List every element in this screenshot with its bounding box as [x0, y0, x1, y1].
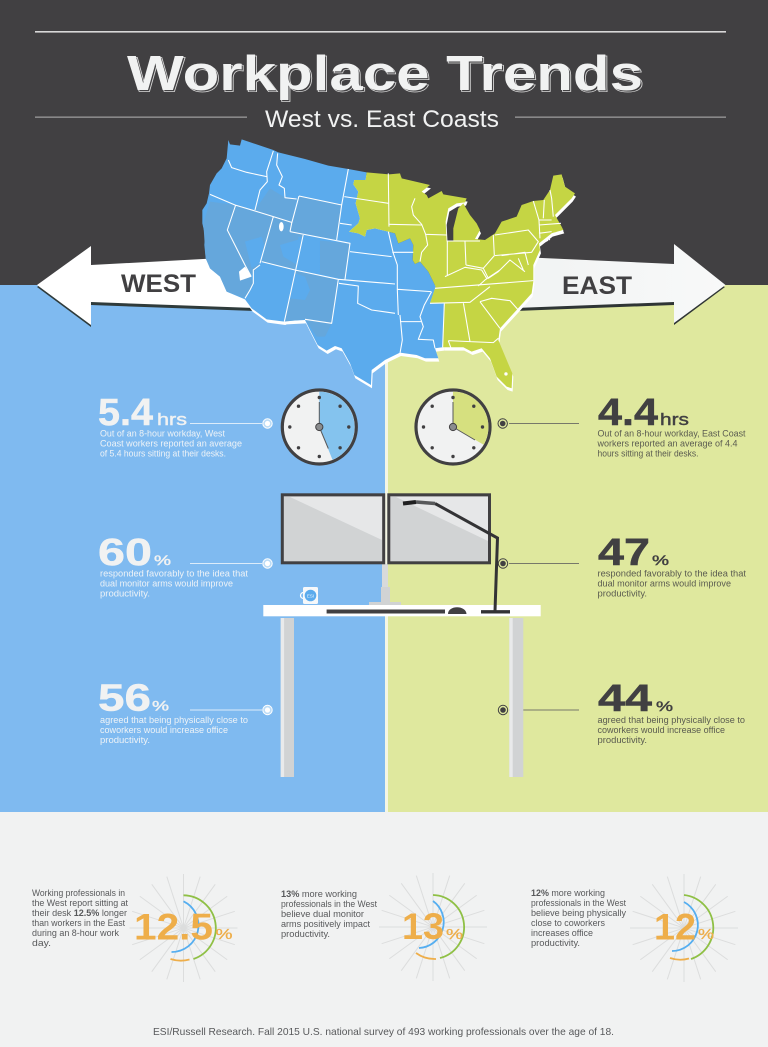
stat: 44 percent east: 44 — [598, 678, 652, 720]
stat: 4.4 hrs east: workers reported an average of 4.4 — [597, 438, 738, 450]
map white offset edge — [203, 143, 576, 392]
label: west: WEST — [121, 270, 196, 298]
stat: 47 percent east: 47 — [598, 532, 650, 574]
figure: 12 — [654, 906, 696, 948]
subtitle: West vs. East Coasts — [265, 106, 499, 133]
text: their desk 12.5% longer — [32, 907, 127, 918]
text: 13% more working — [281, 888, 357, 899]
coffee mug: ESI — [307, 593, 314, 598]
chart: radial burst — [379, 873, 487, 981]
stat: 56 percent west: 56 — [98, 678, 151, 720]
text: professionals in the West — [281, 898, 377, 909]
text: professionals in the West — [531, 897, 626, 908]
right desk leg — [509, 618, 523, 777]
stat: 56 percent west: coworkers would increase office — [100, 725, 228, 736]
text — [32, 887, 128, 948]
stat: 44 percent east — [498, 678, 745, 746]
chart: radial burst — [630, 874, 738, 982]
text: the West report sitting at — [32, 897, 128, 908]
arrow: west — [37, 246, 255, 327]
stat: 60 percent west: 60 — [98, 532, 152, 574]
left monitor — [282, 495, 384, 563]
label: east: EAST — [562, 272, 632, 300]
stat: 4.4 hrs east: hrs — [660, 410, 689, 429]
panel: summary stat 13 — [281, 873, 487, 981]
icon: west clock — [282, 390, 356, 464]
figure — [654, 906, 714, 948]
stat: 4.4 hrs east: 4.4 — [598, 392, 658, 434]
figure: 13 — [402, 906, 444, 947]
stat: 44 percent east: % — [656, 698, 673, 714]
panel: east stats — [498, 392, 746, 746]
figure: % — [446, 926, 463, 943]
text: day. — [32, 937, 51, 948]
source footnote: ESI/Russell Research. Fall 2015 U.S. national survey of 493 working professionals over the age of 18. — [153, 1026, 614, 1038]
text: arms positively impact — [281, 918, 370, 929]
region: west states — [202, 139, 444, 385]
text — [531, 887, 626, 948]
panel: summary background — [0, 812, 768, 1047]
stat: 5.4 hrs west: of 5.4 hours sitting at their desks. — [100, 448, 226, 459]
text: 12% more working — [531, 887, 605, 898]
stat: 47 percent east: responded favorably to the idea that — [598, 568, 746, 580]
mouse — [448, 607, 466, 614]
stat: 60 percent west: dual monitor arms would improve — [100, 578, 233, 590]
stat: 56 percent west: % — [152, 698, 169, 714]
map: United States — [202, 139, 576, 392]
stat: 60 percent west: productivity. — [100, 588, 150, 599]
stat: 5.4 hrs west — [98, 392, 272, 459]
stat: 56 percent west: productivity. — [100, 735, 150, 746]
title: Workplace Trends — [128, 48, 644, 102]
stat: 4.4 hrs east — [498, 392, 746, 459]
text: Working professionals in — [32, 887, 125, 898]
salt lake and coastal details — [209, 222, 508, 376]
stat: 44 percent east: agreed that being physically close to — [598, 715, 745, 726]
panel: west stats — [98, 392, 272, 746]
stat: 47 percent east: % — [652, 552, 669, 568]
panel: east background — [388, 285, 768, 812]
panel: west background — [0, 285, 385, 812]
text: during an 8-hour work — [32, 927, 119, 938]
text — [281, 888, 377, 939]
text: than workers in the East — [32, 917, 125, 928]
stat: 5.4 hrs west: 5.4 — [98, 392, 153, 434]
figure: % — [698, 926, 714, 943]
text: increases office — [531, 927, 593, 938]
desk lamp — [403, 502, 510, 612]
stat: 4.4 hrs east: hours sitting at their desks. — [598, 448, 698, 459]
stat: 5.4 hrs west: hrs — [157, 410, 187, 429]
stat: 47 percent east — [498, 532, 746, 599]
stat: 60 percent west: % — [154, 552, 171, 568]
stat: 47 percent east: dual monitor arms would improve — [598, 578, 731, 590]
text: believe being physically — [531, 907, 626, 918]
stat: 5.4 hrs west: Out of an 8-hour workday, West — [100, 428, 225, 440]
text: close to coworkers — [531, 917, 605, 928]
stat: 44 percent east: productivity. — [598, 735, 647, 746]
text: productivity. — [531, 937, 580, 948]
stat: 47 percent east: productivity. — [598, 588, 647, 599]
stat: 4.4 hrs east: Out of an 8-hour workday, East Coast — [598, 428, 746, 440]
title: Workplace Trends — [127, 47, 643, 101]
text: believe dual monitor — [281, 908, 364, 919]
stat: 60 percent west — [98, 532, 272, 599]
illustration: desk with dual monitors — [263, 495, 541, 777]
desk top — [263, 605, 541, 616]
stat: 56 percent west — [98, 678, 272, 746]
stat: 60 percent west: responded favorably to the idea that — [100, 568, 248, 580]
text: productivity. — [281, 928, 330, 939]
figure: % — [216, 926, 232, 943]
state borders — [210, 151, 563, 353]
icon: east clock — [416, 390, 490, 464]
right monitor — [389, 495, 490, 563]
left desk leg — [281, 618, 294, 777]
region: east states — [349, 172, 575, 388]
arrow: east — [515, 244, 726, 325]
monitor stand — [369, 564, 401, 606]
stat: 5.4 hrs west: Coast workers reported an average — [100, 438, 242, 450]
stat: 44 percent east: coworkers would increase office — [598, 725, 725, 736]
figure: 12.5 — [134, 906, 213, 948]
darker state shading — [203, 188, 350, 337]
coffee mug — [300, 587, 318, 604]
keyboard — [327, 610, 445, 614]
figure — [402, 906, 463, 947]
panel: summary stat 12 — [531, 874, 738, 982]
panel: summary stat 12.5 — [32, 874, 238, 982]
stat: 56 percent west: agreed that being physically close to — [100, 715, 248, 726]
panel: header background — [0, 0, 768, 285]
chart: radial burst — [130, 874, 238, 982]
